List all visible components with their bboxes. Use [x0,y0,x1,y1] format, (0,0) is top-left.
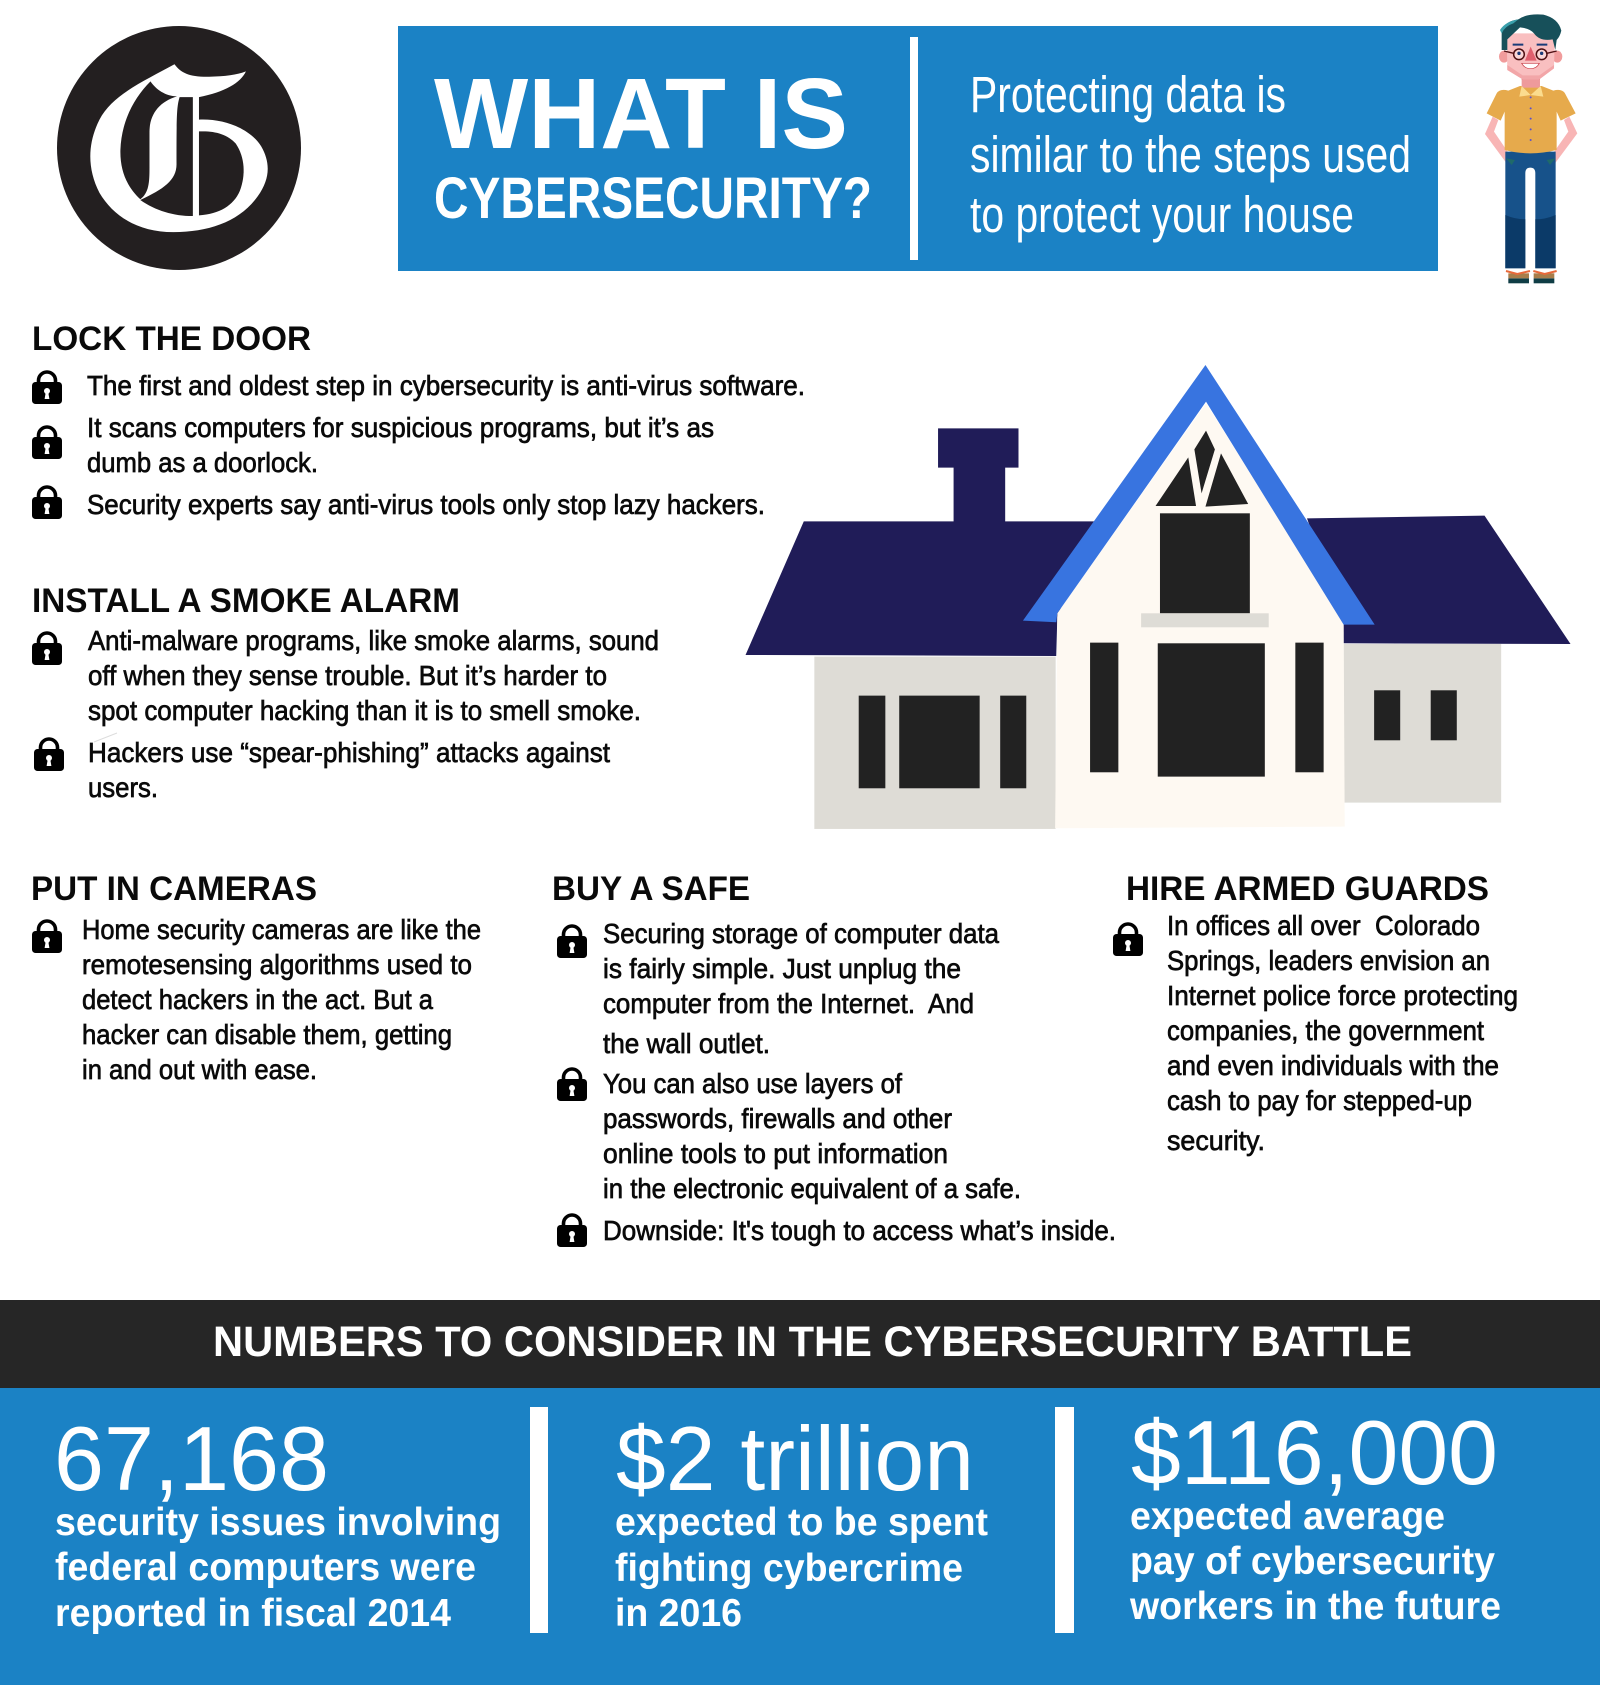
stat: $116,000: $116,000 [1131,1403,1498,1504]
panel: statistics [0,1388,1600,1685]
text: anti-malware programs: Anti-malware programs, like smoke alarms, sound [88,625,659,656]
text: security cameras: detect hackers in the act. But a [82,984,433,1015]
banner: numbers heading: NUMBERS TO CONSIDER IN THE CYBERSECURITY BATTLE [213,1318,1412,1366]
stat: $2 trillion: expected to be spent [615,1501,988,1544]
text: internet police force: companies, the government [1167,1015,1484,1046]
heading: buy a safe: BUY A SAFE [552,870,750,908]
stat: $116,000: workers in the future [1129,1585,1501,1628]
text: downside: Downside: It's tough to access what’s inside. [603,1215,1116,1246]
text: anti-malware programs: off when they sense trouble. But it’s harder to [88,660,607,691]
text: anti-malware programs: spot computer hacking than it is to smell smoke. [88,695,641,726]
stat: $2 trillion: fighting cybercrime [615,1547,963,1590]
heading: cybersecurity: CYBERSECURITY? [434,166,872,231]
heading: put in cameras: PUT IN CAMERAS [31,870,317,908]
illustration: house [746,365,1571,829]
text: lazy hackers: Security experts say anti-virus tools only stop lazy hackers. [87,489,765,520]
text: internet police force: security. [1167,1125,1265,1156]
stat: $2 trillion: $2 trillion [616,1409,974,1510]
text: suspicious programs: It scans computers for suspicious programs, but it’s as [87,412,714,443]
icon: newspaper logo [57,26,301,270]
text: suspicious programs: dumb as a doorlock. [87,447,318,478]
text: layers of passwords: online tools to put information [603,1138,948,1169]
text: layers of passwords [603,1068,1021,1204]
panel: install a smoke alarm [32,582,659,803]
text: internet police force: Springs, leaders envision an [1167,945,1490,976]
stat: $116,000: expected average [1130,1495,1445,1538]
panel: hire armed guards [1113,870,1518,1156]
text: internet police force: Internet police force protecting [1167,980,1518,1011]
text: securing storage: is fairly simple. Just unplug the [603,953,961,984]
text: internet police force [1167,910,1518,1156]
icon: padlock [557,926,587,958]
subtitle text: to protect your house [970,186,1354,243]
stat: $2 trillion: in 2016 [615,1592,742,1635]
text: spear-phishing: Hackers use “spear-phishing” attacks against [88,737,610,768]
text: internet police force: In offices all over Colorado [1167,910,1480,941]
text: securing storage: the wall outlet. [603,1028,770,1059]
subtitle text: similar to the steps used [970,126,1411,183]
heading: hire armed guards: HIRE ARMED GUARDS [1126,870,1489,908]
text: anti-virus software: The first and oldest step in cybersecurity is anti-virus software. [87,370,805,401]
text: spear-phishing: users. [88,772,158,803]
heading: what is: WHAT IS [434,58,848,170]
icon: padlock [32,487,62,519]
text: securing storage: Securing storage of computer data [603,918,999,949]
text: suspicious programs [87,412,714,478]
text: spear-phishing [88,737,610,803]
icon: padlock [32,921,62,953]
icon: padlock [32,372,62,404]
icon: padlock [1113,924,1143,956]
stat: 67,168: federal computers were [55,1546,476,1589]
text: securing storage [603,918,999,1059]
banner: numbers heading [0,1300,1600,1388]
heading: lock the door: LOCK THE DOOR [32,320,311,358]
subtitle text [970,66,1411,243]
text: security cameras [82,914,481,1085]
icon: padlock [557,1069,587,1101]
icon: padlock [557,1215,587,1247]
text: layers of passwords: in the electronic equivalent of a safe. [603,1173,1021,1204]
panel: title banner [398,26,1438,271]
text: internet police force: cash to pay for stepped-up [1167,1085,1472,1116]
text: security cameras: Home security cameras are like the [82,914,481,945]
text: security cameras: remotesensing algorithms used to [82,949,472,980]
text: layers of passwords: You can also use layers of [603,1068,902,1099]
stat: 67,168: reported in fiscal 2014 [55,1592,451,1635]
subtitle text: Protecting data is [970,66,1286,123]
panel: lock the door [32,320,805,520]
panel: put in cameras [31,870,481,1085]
heading: install a smoke alarm: INSTALL A SMOKE ALARM [32,582,460,620]
stat: $2 trillion [615,1409,988,1635]
panel: buy a safe [552,870,1116,1247]
icon: padlock [32,427,62,459]
stat: 67,168 [54,1409,501,1635]
text: security cameras: in and out with ease. [82,1054,317,1085]
stat: 67,168: 67,168 [54,1409,329,1510]
stat: $116,000: pay of cybersecurity [1130,1540,1495,1583]
icon: man with glasses [1485,14,1577,283]
icon: padlock [34,739,64,771]
stat: $116,000 [1129,1403,1501,1628]
text: anti-malware programs [88,625,659,726]
icon: padlock [32,633,62,665]
stat: 67,168: security issues involving [55,1501,501,1544]
text: layers of passwords: passwords, firewalls and other [603,1103,952,1134]
text: securing storage: computer from the Internet. And [603,988,974,1019]
text: security cameras: hacker can disable them, getting [82,1019,452,1050]
text: internet police force: and even individuals with the [1167,1050,1499,1081]
